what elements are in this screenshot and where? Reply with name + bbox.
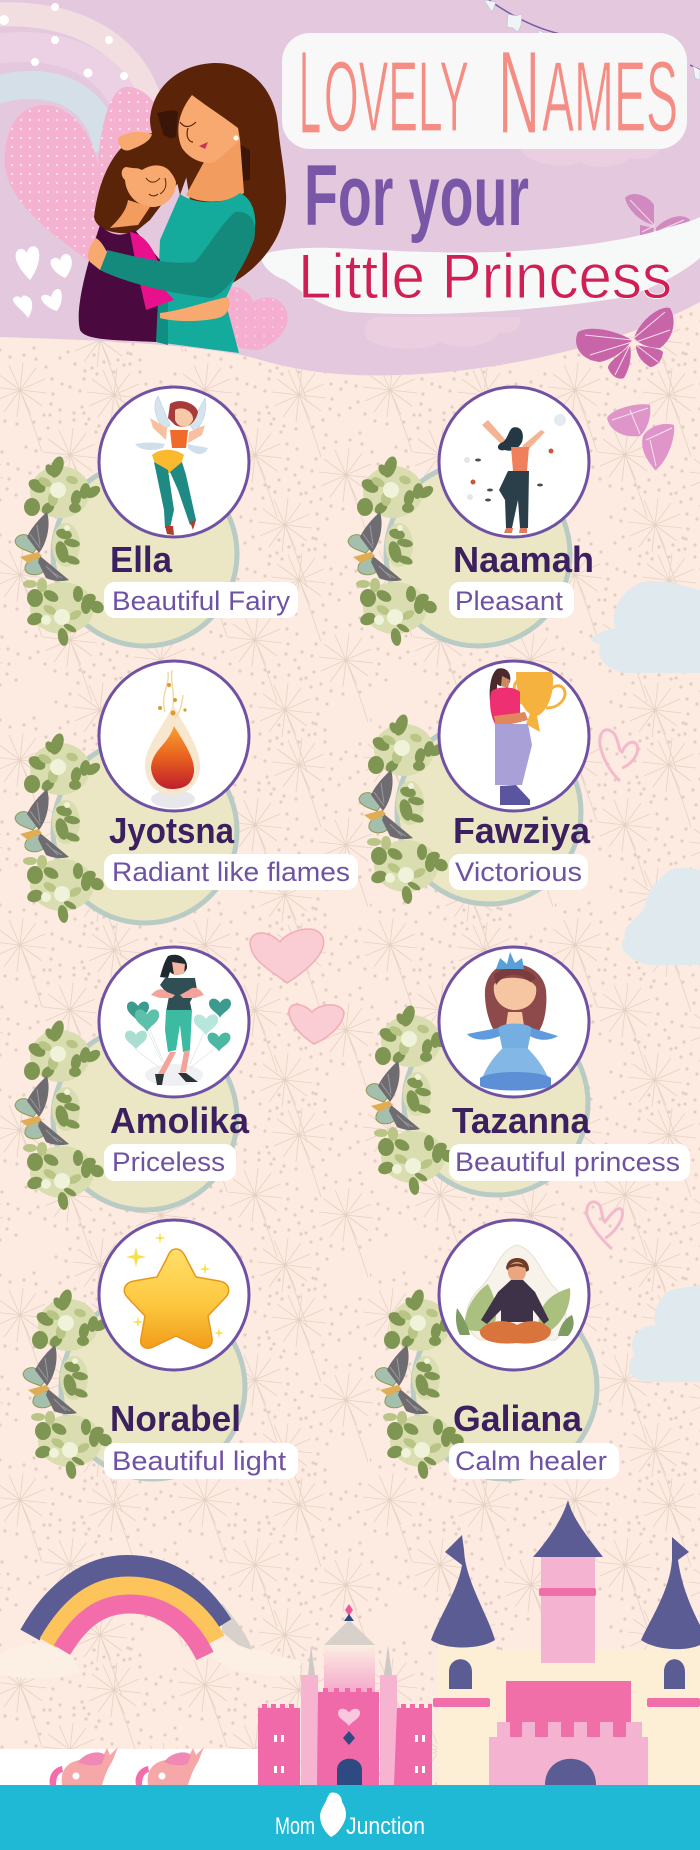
cloud: blue lower — [629, 1285, 700, 1382]
white ground strip — [0, 1749, 258, 1785]
meaning: Victorious — [455, 857, 582, 887]
illustration: mother and daughter — [79, 63, 286, 353]
butterfly: pink right of row one — [607, 404, 674, 470]
name: Fawziya — [453, 810, 591, 851]
icon: girl with trophy — [490, 668, 565, 805]
floral wreath — [15, 1019, 237, 1211]
meaning: Beautiful Fairy — [112, 586, 291, 616]
name: Amolika — [110, 1100, 250, 1141]
portrait circle — [439, 661, 589, 811]
floral wreath — [15, 732, 237, 924]
floral wreath — [15, 455, 237, 647]
scene: bottom rainbow — [0, 1566, 300, 1678]
name: Norabel — [110, 1398, 241, 1439]
white brush stroke — [260, 217, 700, 314]
butterfly: small header — [625, 194, 690, 238]
name: Naamah — [453, 539, 594, 580]
portrait circle — [99, 1220, 249, 1370]
card: Galiana — [375, 1220, 619, 1480]
title: Little Princess: Little Princess — [298, 242, 672, 312]
logo: MomJunction — [275, 1793, 425, 1840]
sketch heart: pink outline lower — [587, 1202, 622, 1249]
meaning pill — [104, 1443, 298, 1479]
title: Lovely Names: L — [299, 27, 321, 159]
floral wreath — [348, 455, 570, 647]
portrait circle — [439, 947, 589, 1097]
meaning: Beautiful light — [112, 1446, 287, 1476]
portrait circle — [439, 1220, 589, 1370]
logo: MomJunction: Junction — [346, 1813, 425, 1840]
scene: large castle — [431, 1500, 700, 1785]
card: Norabel — [23, 1220, 298, 1480]
meaning: Pleasant — [455, 586, 564, 616]
name: Jyotsna — [109, 810, 235, 851]
meaning pill — [449, 1443, 619, 1479]
title: Lovely Names: N — [498, 27, 540, 159]
white title panel — [282, 33, 687, 149]
icon: woman with heart balloons — [125, 955, 231, 1086]
icon: flame — [145, 670, 200, 808]
sketch heart: pink outline upper — [600, 730, 638, 781]
meaning pill — [449, 582, 574, 618]
card: Tazanna — [366, 947, 690, 1196]
floral wreath — [366, 1004, 588, 1196]
logo: MomJunction: Mom — [275, 1813, 315, 1840]
logo figure — [320, 1793, 346, 1837]
scene: pink castle — [258, 1604, 432, 1785]
meaning: Priceless — [112, 1147, 225, 1177]
meaning pill — [449, 854, 588, 890]
meaning pill — [104, 1144, 236, 1181]
cloud: blue upper — [590, 581, 700, 673]
rainbow arcs background — [0, 3, 155, 150]
panel: header — [0, 0, 700, 379]
footer band — [0, 1785, 700, 1850]
meaning pill — [104, 854, 358, 890]
icon: princess — [467, 952, 558, 1090]
icon: star — [124, 1232, 229, 1348]
icon: fairy — [135, 396, 208, 535]
card: Naamah — [348, 387, 594, 647]
portrait circle — [99, 661, 249, 811]
small dotted heart — [225, 287, 288, 350]
unicorn: right — [136, 1747, 204, 1785]
floral wreath — [375, 1288, 597, 1480]
unicorn: left — [50, 1747, 118, 1785]
butterfly: large header — [576, 308, 674, 379]
icon: joyful woman — [464, 414, 566, 533]
card: Jyotsna — [15, 661, 358, 924]
floral wreath — [23, 1288, 245, 1480]
icon: meditating woman — [456, 1245, 574, 1344]
pink clouds — [365, 149, 660, 349]
title: Lovely Names: OVELY — [324, 41, 469, 153]
sketch heart: filled large — [250, 929, 324, 983]
portrait circle — [99, 387, 249, 537]
name: Ella — [110, 539, 173, 580]
card: Fawziya — [359, 661, 591, 905]
floral wreath — [359, 713, 581, 905]
meaning: Radiant like flames — [112, 857, 350, 887]
portrait circle — [99, 947, 249, 1097]
meaning: Beautiful princess — [455, 1147, 680, 1177]
name: Tazanna — [452, 1100, 591, 1141]
bunting — [484, 0, 700, 80]
cloud: blue middle — [622, 868, 700, 965]
meaning: Calm healer — [455, 1446, 607, 1476]
white hearts — [13, 246, 72, 318]
card: Amolika — [15, 947, 250, 1211]
name: Galiana — [453, 1398, 583, 1439]
portrait circle — [439, 387, 589, 537]
meaning pill — [449, 1144, 690, 1181]
card: Ella — [15, 387, 298, 647]
sketch heart: filled small — [289, 1004, 344, 1044]
big heart — [5, 87, 167, 265]
meaning pill — [104, 582, 298, 618]
title: For your: For your — [304, 148, 529, 244]
